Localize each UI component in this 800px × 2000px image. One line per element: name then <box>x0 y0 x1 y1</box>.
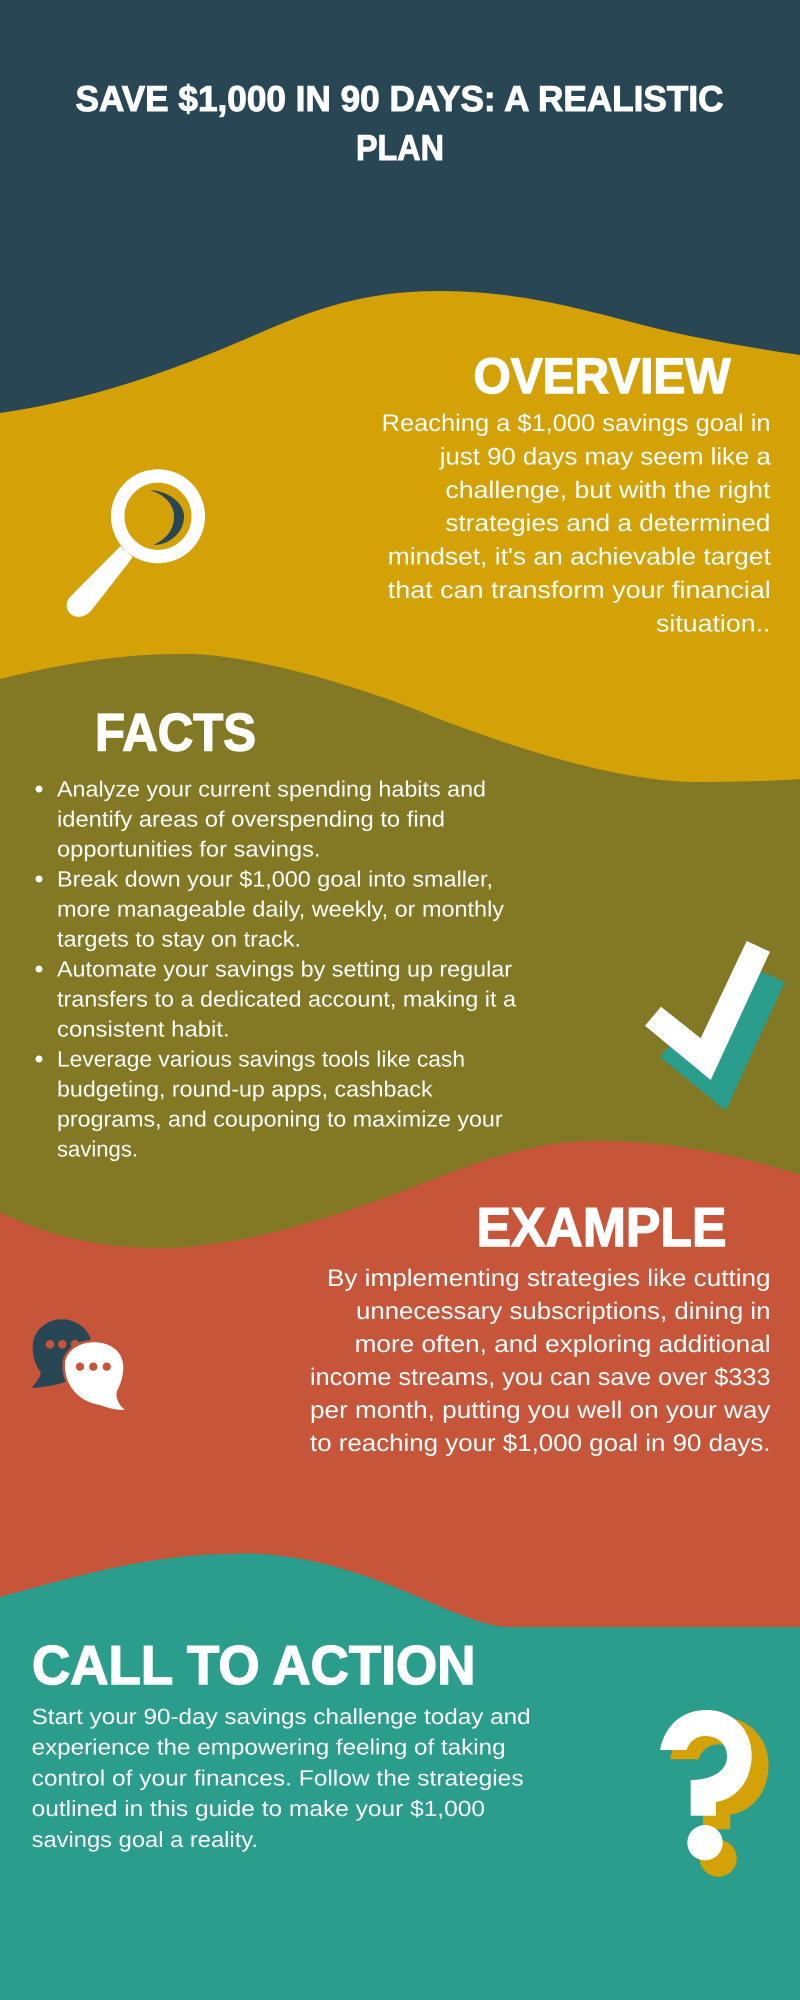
heading: example: EXAMPLE <box>476 1196 726 1258</box>
icon: check mark <box>645 941 785 1111</box>
bullet list: facts: opportunities for savings. <box>57 836 320 861</box>
bullet list: facts: transfers to a dedicated account, making it a <box>57 986 517 1011</box>
bullet list: facts: Analyze your current spending habits and <box>57 776 486 801</box>
bullet list: facts: Automate your savings by setting up regular <box>57 956 512 981</box>
title <box>76 78 724 168</box>
text block: example: income streams, you can save over $333 <box>310 1364 770 1391</box>
text block: overview: mindset, it's an achievable target <box>388 544 771 571</box>
text block: call to action: Start your 90-day savings challenge today and <box>32 1704 531 1729</box>
bullet list: facts: Leverage various savings tools like cash <box>57 1046 465 1071</box>
panel: call to action background <box>0 1554 800 2000</box>
bullet list: facts: programs, and couponing to maximize your <box>57 1106 503 1131</box>
text block: overview: Reaching a $1,000 savings goal in <box>382 410 771 437</box>
text block: overview: just 90 days may seem like a <box>439 443 771 470</box>
text block: example: per month, putting you well on your way <box>310 1397 770 1424</box>
text block: call to action: experience the empowering feeling of taking <box>32 1735 506 1760</box>
title: PLAN <box>356 127 444 168</box>
panel: facts background <box>0 654 800 2000</box>
text block: overview: situation.. <box>656 610 770 637</box>
title: SAVE $1,000 IN 90 DAYS: A REALISTIC <box>76 78 724 119</box>
text block: overview: strategies and a determined <box>445 510 770 537</box>
bullet list: facts <box>36 776 517 1161</box>
text block: call to action: control of your finances. Follow the strategies <box>32 1765 524 1790</box>
bullet list: facts: Break down your $1,000 goal into smaller, <box>57 866 493 891</box>
text block: example <box>310 1265 771 1457</box>
heading: overview: OVERVIEW <box>474 348 731 404</box>
bullet list: facts: budgeting, round-up apps, cashback <box>57 1076 434 1101</box>
text block: overview: challenge, but with the right <box>445 477 771 504</box>
text block: example: By implementing strategies like cutting <box>327 1265 770 1292</box>
bullet list: facts: consistent habit. <box>57 1016 230 1041</box>
heading: facts: FACTS <box>95 704 256 762</box>
text block: example: more often, and exploring additional <box>355 1331 771 1358</box>
icon: question mark <box>660 1710 769 1877</box>
text block: overview <box>382 410 771 637</box>
heading: call to action: CALL TO ACTION <box>32 1634 476 1696</box>
text block: call to action <box>32 1704 531 1852</box>
icon: speech bubbles <box>32 1319 125 1410</box>
text block: example: to reaching your $1,000 goal in 90 days. <box>310 1430 770 1457</box>
icon: magnifying glass <box>67 476 198 617</box>
bullet list: facts: identify areas of overspending to find <box>57 806 445 831</box>
text block: example: unnecessary subscriptions, dining in <box>356 1298 770 1325</box>
bullet list: facts: targets to stay on track. <box>57 926 301 951</box>
bullet list: facts: savings. <box>57 1136 138 1161</box>
panel: example background <box>0 1141 800 2000</box>
text block: overview: that can transform your financial <box>388 577 771 604</box>
bullet list: facts: more manageable daily, weekly, or monthly <box>57 896 504 921</box>
text block: call to action: outlined in this guide to make your $1,000 <box>32 1796 485 1821</box>
text block: call to action: savings goal a reality. <box>32 1827 258 1852</box>
